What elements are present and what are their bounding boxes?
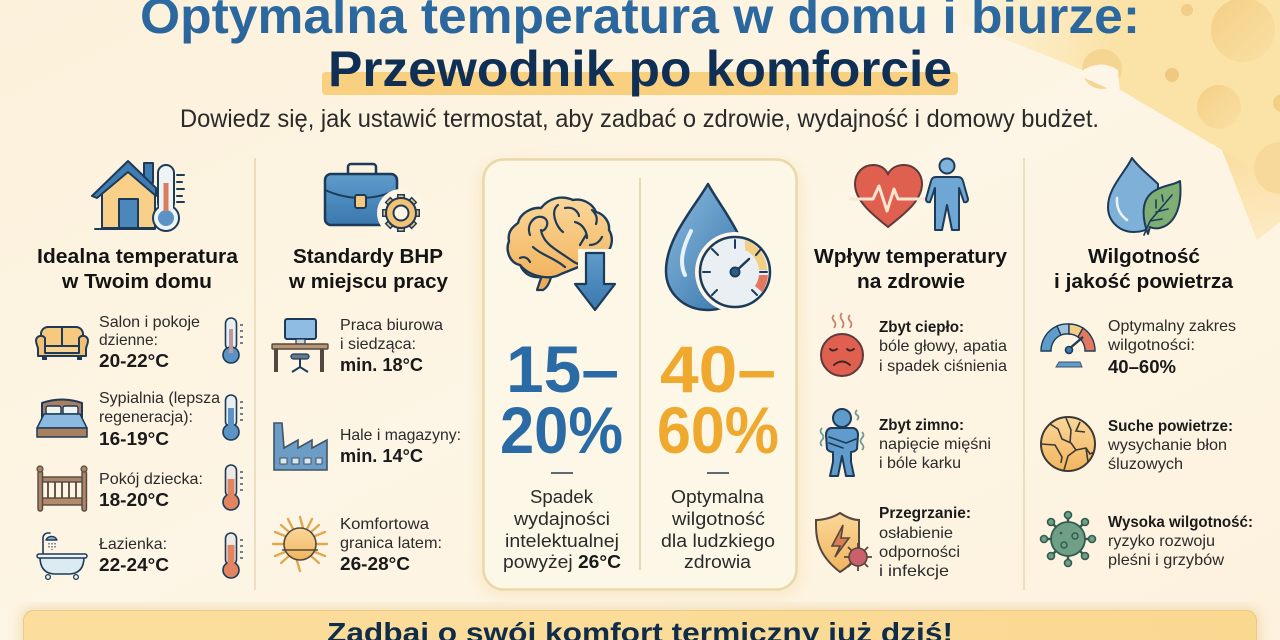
icon: thermometer	[223, 533, 243, 578]
text: child room: Pokój dziecka:	[99, 471, 203, 488]
text: too cold	[879, 417, 991, 472]
heading	[814, 245, 1008, 293]
icon: water drop with gauge	[666, 184, 775, 312]
stat: productivity: intelektualnej	[505, 531, 619, 551]
text: too cold: i bóle karku	[879, 455, 961, 472]
icon: thermometer	[223, 318, 243, 363]
text: overheating: odporności	[879, 544, 960, 561]
text: too hot: i spadek ciśnienia	[879, 358, 1007, 375]
stat: productivity: Spadek	[530, 487, 594, 507]
heading: Standardy BHP	[293, 245, 443, 268]
text: halls: Hale i magazyny:	[340, 427, 461, 444]
text: dry air: wysychanie błon	[1107, 437, 1227, 454]
stat: humidity: Optymalna	[671, 487, 765, 507]
text: child room: 18-20°C	[99, 490, 169, 510]
text: overheating: i infekcje	[879, 563, 949, 580]
text: summer limit: granica latem:	[340, 535, 442, 552]
decoration: cheese corner	[950, 0, 1280, 240]
text: optimal humidity	[1107, 318, 1236, 377]
stat: humidity: dla ludzkiego	[661, 531, 775, 551]
text: too hot	[879, 319, 1007, 375]
icon: desk	[272, 319, 328, 372]
text: living room: Salon i pokoje	[99, 314, 200, 331]
stat: humidity: 40–	[660, 332, 776, 406]
icon: brain with down arrow	[508, 198, 616, 310]
heading: w Twoim domu	[61, 270, 212, 293]
text: summer limit	[340, 516, 442, 574]
text: summer limit: 26-28°C	[340, 554, 410, 574]
stat: humidity: 60%	[657, 393, 779, 467]
text: bedroom: 16-19°C	[99, 429, 169, 449]
icon: drop and leaf	[1108, 158, 1180, 235]
icon: bed	[37, 400, 87, 437]
text: dry air	[1107, 418, 1233, 473]
heading: i jakość powietrza	[1054, 270, 1234, 293]
text: overheating: osłabienie	[879, 525, 953, 542]
text: dry air: śluzowych	[1108, 456, 1183, 473]
title line 2: Przewodnik po komforcie	[328, 41, 952, 97]
icon: thermometer	[223, 395, 243, 440]
text: high humidity: ryzyko rozwoju	[1108, 533, 1215, 550]
icon: sun	[273, 517, 327, 571]
icon: thermometer	[223, 465, 243, 510]
icon: bathtub	[37, 533, 87, 579]
text: optimal humidity: Optymalny zakres	[1108, 318, 1236, 335]
text: optimal humidity: 40–60%	[1108, 357, 1176, 377]
text: bedroom: regeneracja):	[99, 409, 193, 426]
text: office work	[340, 317, 443, 375]
panel: home temperature	[36, 161, 243, 579]
panel: workplace standards	[272, 164, 461, 574]
icon: hot face	[821, 313, 863, 376]
text: bedroom	[99, 390, 220, 449]
text: high humidity	[1108, 514, 1253, 569]
icon: humidity gauge	[1041, 324, 1095, 367]
icon: crib	[37, 466, 87, 511]
text: living room: dzienne:	[99, 332, 158, 349]
text: halls: min. 14°C	[340, 446, 423, 466]
icon: mold virus	[1040, 512, 1096, 566]
title highlight	[322, 72, 958, 95]
text: bedroom: Sypialnia (lepsza	[99, 390, 220, 407]
subtitle: Dowiedz się, jak ustawić termostat, aby zadbać o zdrowie, wydajność i domowy budżet.	[180, 105, 1099, 133]
panel: humidity and air quality	[1040, 158, 1253, 569]
panel: key statistics card	[477, 160, 803, 598]
stat: productivity	[500, 332, 623, 572]
icon: factory	[274, 423, 327, 470]
heading: Wpływ temperatury	[814, 245, 1008, 268]
text: overheating: Przegrzanie:	[879, 505, 971, 522]
text: child room	[99, 471, 203, 510]
heading: na zdrowie	[857, 270, 965, 293]
text: overheating	[879, 505, 971, 580]
text: office work: Praca biurowa	[340, 317, 443, 334]
stat: productivity: 20%	[500, 393, 623, 467]
text: summer limit: Komfortowa	[340, 516, 429, 533]
heading	[288, 245, 449, 293]
text: too cold: Zbyt zimno:	[879, 417, 964, 434]
icon: cold person	[820, 409, 864, 476]
text: too hot: bóle głowy, apatia	[879, 338, 1007, 355]
text: too cold: napięcie mięśni	[879, 436, 991, 453]
text: halls	[340, 427, 461, 466]
heading	[1054, 245, 1234, 293]
icon: shield with virus	[816, 513, 872, 572]
icon: house with thermometer	[92, 161, 184, 231]
stat: productivity: 15–	[506, 332, 619, 406]
heading	[37, 245, 239, 293]
stat: productivity: wydajności	[513, 509, 610, 529]
icon: heart and person	[851, 158, 968, 230]
text: high humidity: pleśni i grzybów	[1108, 552, 1224, 569]
stat: humidity: wilgotność	[671, 509, 765, 529]
stat: humidity	[657, 332, 779, 572]
text: too hot: Zbyt ciepło:	[879, 319, 964, 336]
stat: humidity: zdrowia	[684, 552, 752, 572]
icon: cracked dry surface	[1041, 417, 1095, 471]
text: bathroom: 22-24°C	[99, 555, 169, 575]
text: office work: i siedząca:	[340, 336, 416, 353]
title	[140, 0, 1140, 97]
banner: call to action	[20, 607, 1260, 640]
text: bathroom: Łazienka:	[99, 536, 167, 553]
heading: Idealna temperatura	[37, 245, 239, 268]
heading: Wilgotność	[1088, 245, 1200, 268]
heading: w miejscu pracy	[288, 270, 449, 293]
text: high humidity: Wysoka wilgotność:	[1108, 514, 1253, 531]
text: living room	[99, 314, 200, 371]
text: optimal humidity: wilgotności:	[1107, 337, 1195, 354]
panel: health effects	[814, 158, 1008, 580]
text: office work: min. 18°C	[340, 355, 423, 375]
stat: productivity: powyżej 26°C	[503, 552, 621, 572]
text: dry air: Suche powietrze:	[1108, 418, 1233, 435]
text: bathroom	[99, 536, 169, 575]
icon: briefcase with gear	[325, 164, 425, 237]
text: living room: 20-22°C	[99, 351, 169, 371]
icon: sofa	[36, 327, 88, 360]
